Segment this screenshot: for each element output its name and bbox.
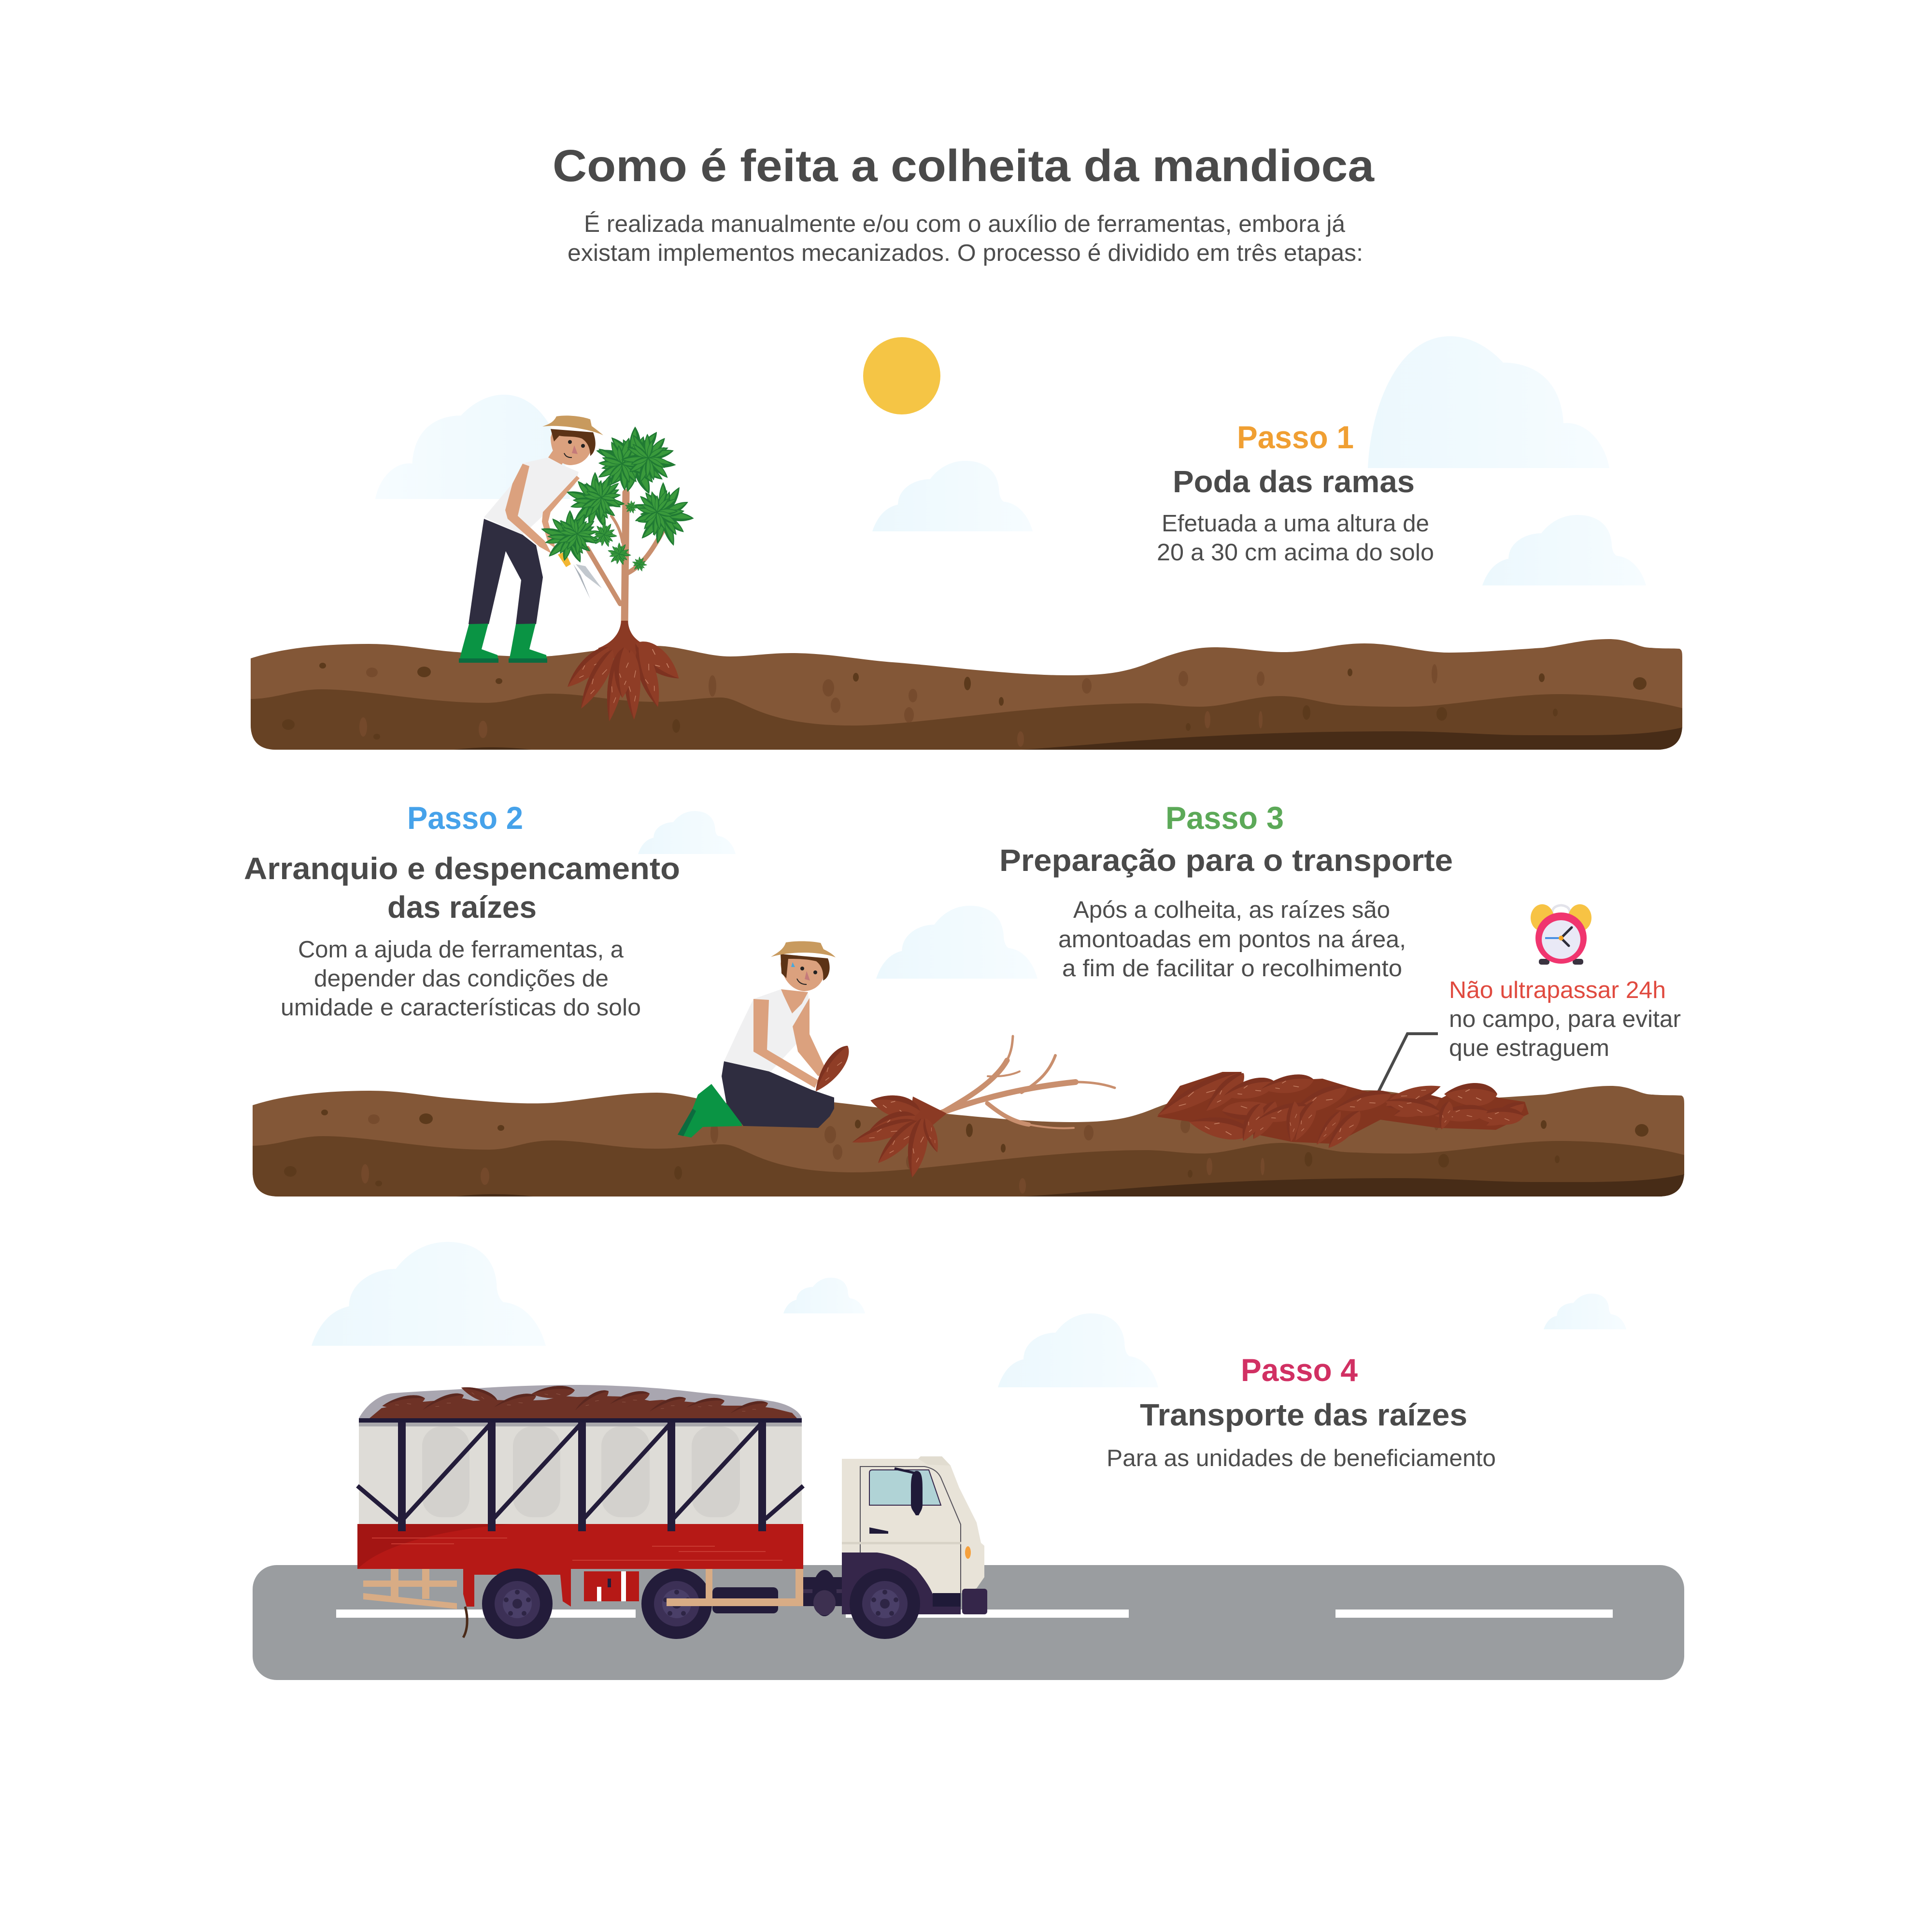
illustration: cassava plant — [540, 420, 695, 723]
farmer shirt — [484, 457, 579, 535]
heading: passo 3: Passo 3 — [1165, 800, 1284, 836]
truck rear wheels — [482, 1568, 712, 1639]
callout: 24h warning — [1449, 977, 1681, 1061]
tuber in hands — [809, 1041, 855, 1097]
heading: arranquio: das raízes — [387, 890, 537, 925]
uprooted tubers — [850, 1090, 947, 1179]
farmer head — [771, 941, 836, 1013]
callout: 24h warning: Não ultrapassar 24h — [1449, 977, 1666, 1003]
icon: alarm clock — [1531, 904, 1591, 965]
truck fuel tank and gearbox — [712, 1570, 843, 1616]
farmer arms — [753, 998, 826, 1088]
body text step 2: umidade e características do solo — [281, 995, 641, 1021]
clouds — [312, 336, 1646, 1387]
truck red body — [357, 1524, 803, 1569]
panel: step 4 text — [1107, 1352, 1496, 1471]
body text step 2 — [281, 937, 641, 1021]
body text step 3: Após a colheita, as raízes são — [1073, 897, 1390, 923]
ground: step 2 soil — [253, 1086, 1684, 1197]
title: Como é feita a colheita da mandioca — [553, 141, 1375, 191]
truck frame posts — [357, 1423, 803, 1531]
farmer pants — [469, 519, 543, 624]
body text step 3: amontoadas em pontos na área, — [1058, 926, 1406, 953]
truck load of roots — [369, 1382, 797, 1419]
road — [253, 1565, 1684, 1680]
intro text — [568, 211, 1363, 266]
panel: step 2 text — [244, 800, 680, 1021]
illustration: truck — [357, 1382, 987, 1639]
body text step 2: Com a ajuda de ferramentas, a — [298, 937, 624, 963]
truck cargo panel — [359, 1423, 802, 1524]
farmer boots — [459, 624, 547, 663]
heading: arranquio — [244, 851, 680, 925]
heading: passo 1: Passo 1 — [1237, 419, 1354, 455]
illustration: farmer kneeling — [678, 941, 855, 1138]
truck tarp — [359, 1385, 802, 1418]
cassava roots — [562, 621, 686, 723]
truck cab — [842, 1456, 987, 1614]
illustration: farmer pruning — [459, 415, 603, 663]
plant leaves — [540, 420, 695, 572]
farmer shirt — [724, 989, 810, 1071]
heading: arranquio: Arranquio e despencamento — [244, 851, 680, 886]
truck top rail — [359, 1418, 802, 1423]
icon: sun — [863, 337, 940, 414]
callout: 24h warning: que estraguem — [1449, 1035, 1609, 1061]
plant stems — [587, 493, 663, 628]
farmer head — [542, 415, 603, 465]
heading: preparacao: Preparação para o transporte — [999, 843, 1453, 878]
truck front wheel — [850, 1568, 920, 1639]
illustration: uprooted plant — [850, 1036, 1115, 1179]
heading: passo 2: Passo 2 — [407, 800, 523, 836]
body text step 1: 20 a 30 cm acima do solo — [1157, 540, 1434, 566]
heading: passo 4: Passo 4 — [1241, 1352, 1358, 1388]
uprooted stems — [939, 1036, 1115, 1128]
illustration: pile of roots — [1153, 1066, 1529, 1154]
truck under frame — [463, 1569, 639, 1638]
intro text: existam implementos mecanizados. O processo é dividido em três etapas: — [568, 240, 1363, 266]
body text step 1 — [1157, 511, 1434, 566]
icon: pruning shears — [558, 552, 602, 599]
callout: 24h warning: no campo, para evitar — [1449, 1006, 1681, 1032]
body text step 4: Para as unidades de beneficiamento — [1107, 1445, 1496, 1471]
truck side wood step — [667, 1569, 803, 1606]
farmer arms — [505, 464, 580, 554]
body text step 1: Efetuada a uma altura de — [1162, 511, 1429, 537]
panel: step 3 text — [999, 800, 1453, 982]
intro text: É realizada manualmente e/ou com o auxílio de ferramentas, embora já — [584, 211, 1346, 237]
body text step 3 — [1058, 897, 1406, 982]
panel: step 1 text — [1157, 419, 1434, 566]
heading: poda das ramas: Poda das ramas — [1173, 464, 1415, 499]
leader line — [1377, 1034, 1438, 1096]
farmer pants — [722, 1061, 834, 1128]
heading: transporte: Transporte das raízes — [1140, 1397, 1467, 1432]
body text step 3: a fim de facilitar o recolhimento — [1062, 955, 1402, 982]
ground: step 1 soil — [251, 639, 1682, 750]
truck rear wood frame — [363, 1569, 457, 1609]
body text step 2: depender das condições de — [314, 966, 609, 992]
farmer boots — [678, 1084, 742, 1138]
